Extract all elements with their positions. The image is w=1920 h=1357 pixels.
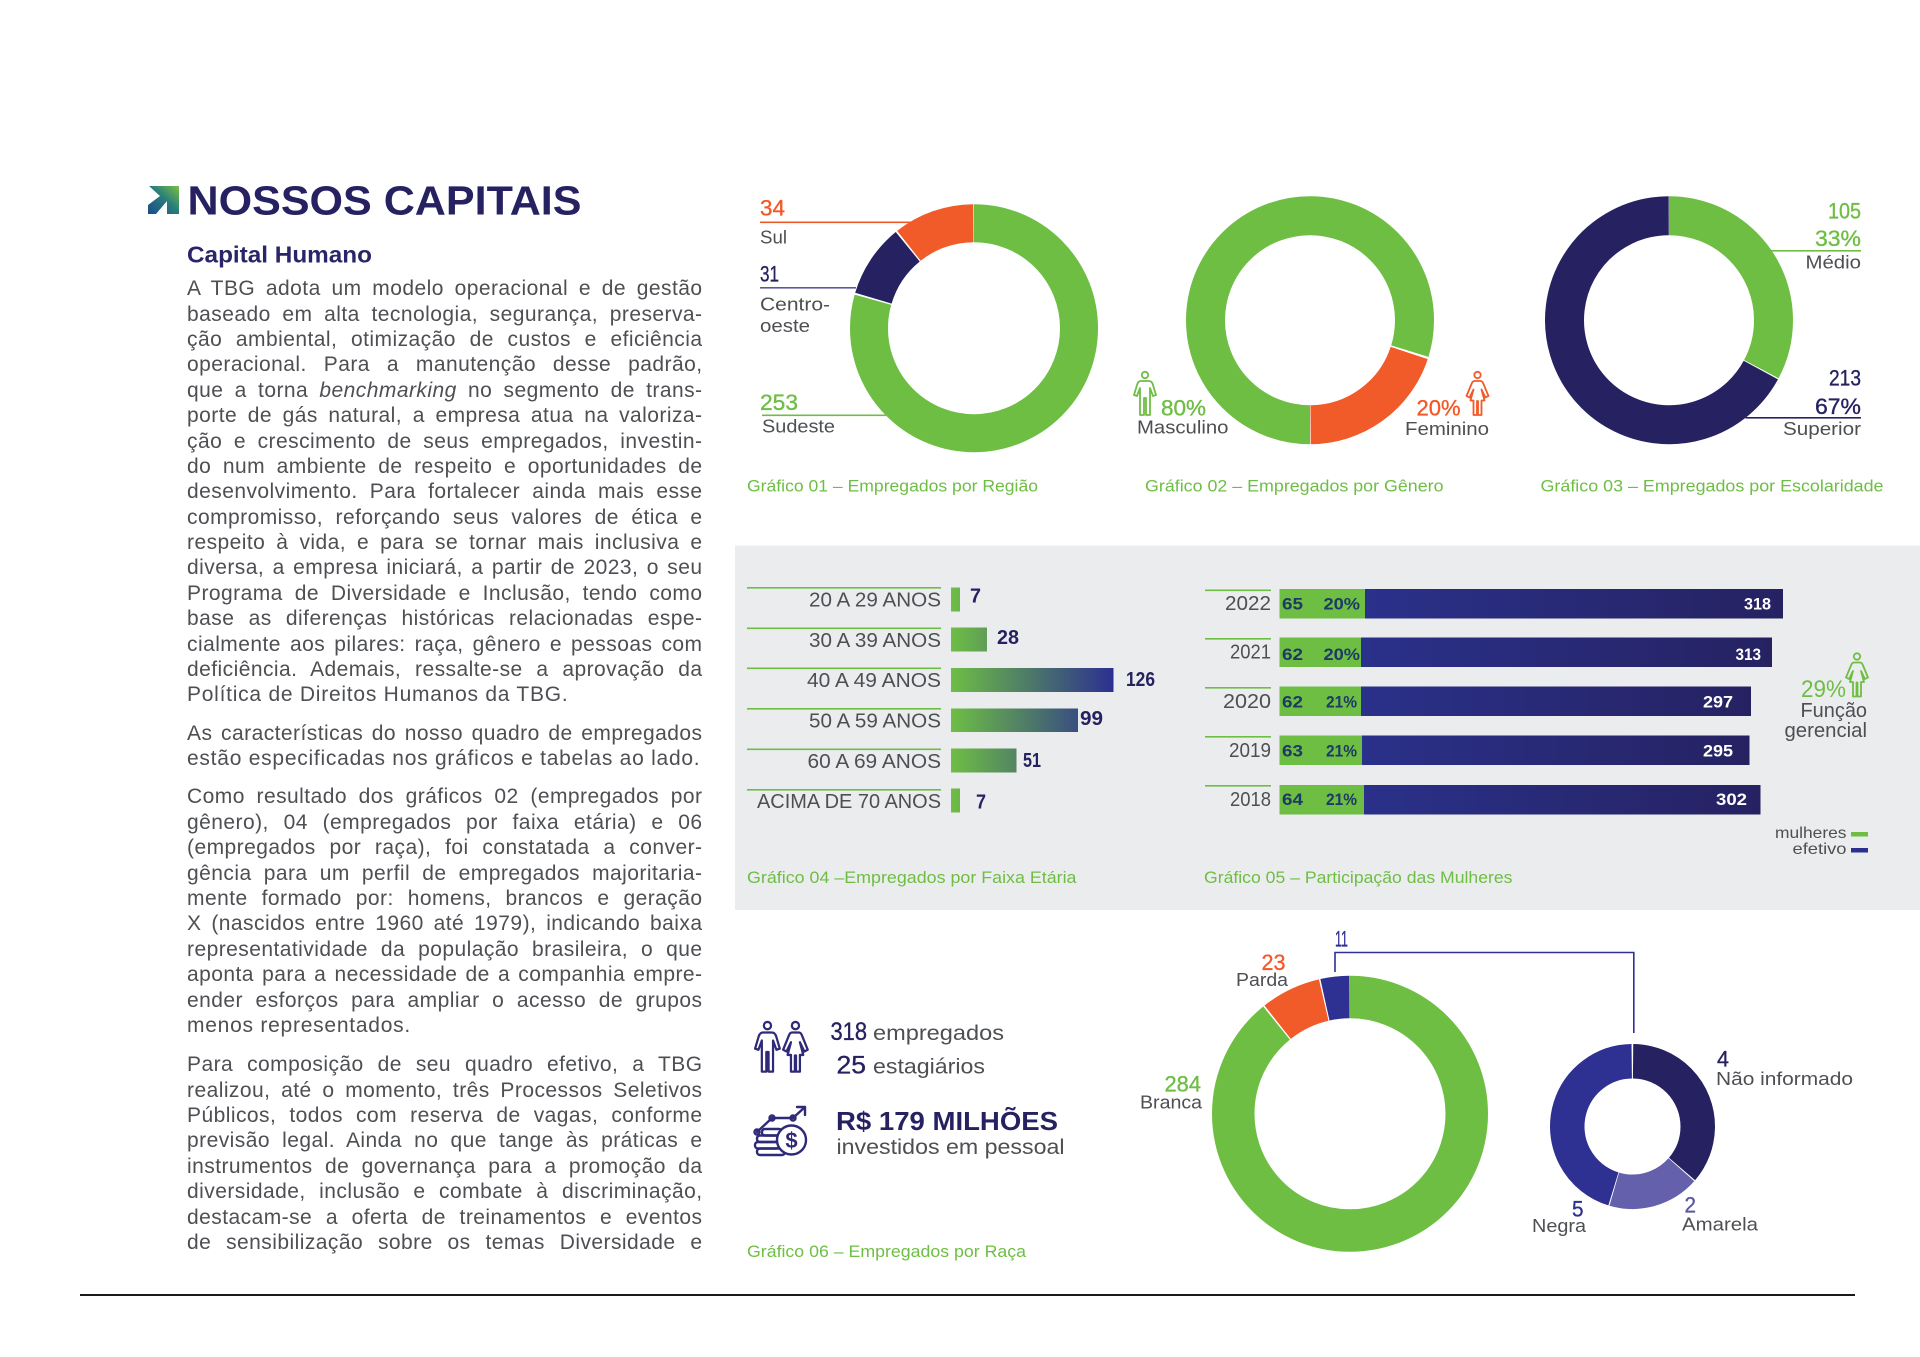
- paragraph 3: gênero), 04 (empregados por faixa etária) e 06: [187, 811, 702, 834]
- label: 11: 11: [1335, 926, 1348, 952]
- row: 2022: 20%: [1324, 596, 1360, 614]
- row: 2020: [1205, 686, 1751, 716]
- chart 04: employees by age: [747, 586, 1155, 887]
- paragraph 4: realizou, até o momento, três Processos Seletivos: [187, 1079, 702, 1102]
- legend: [1775, 825, 1868, 858]
- text: 25 estagiários: estagiários: [873, 1056, 985, 1078]
- paragraph 4: Para composição de seu quadro efetivo, a TBG: [187, 1053, 702, 1076]
- paragraph 3: (empregados por raça), foi constatada a conver-: [187, 836, 702, 859]
- paragraph 3: X (nascidos entre 1960 até 1979), indicando baixa: [187, 912, 702, 935]
- paragraph 1: baseado em alta tecnologia, segurança, preserva-: [187, 303, 702, 326]
- paragraph 1: Política de Direitos Humanos da TBG.: [187, 683, 568, 706]
- label: Feminino: Feminino: [1405, 418, 1489, 439]
- paragraph 1: porte de gás natural, a empresa atua na valoriza-: [187, 404, 702, 427]
- label: Parda: 23: [1262, 950, 1286, 975]
- donut: education: [1527, 179, 1811, 462]
- row: 40 a 49 anos: 40 A 49 ANOS: [807, 670, 941, 692]
- label: Centro-oeste: oeste: [760, 315, 810, 336]
- label: Médio: [1771, 198, 1861, 273]
- label: Não informado: 4: [1717, 1046, 1729, 1072]
- label: Médio: Médio: [1806, 252, 1861, 273]
- row: 30 a 39 anos: [747, 627, 1019, 652]
- caption: chart 02: Gráfico 02 – Empregados por Gênero: [1145, 476, 1444, 495]
- paragraph 4: destacam-se a oferta de treinamentos e eventos: [187, 1206, 702, 1229]
- row: 40 a 49 anos: 126: [1126, 669, 1155, 691]
- row: 40 a 49 anos: [747, 668, 1155, 692]
- label: Branca: Branca: [1140, 1092, 1203, 1112]
- label: Médio: 105: [1828, 198, 1861, 224]
- label: Centro-oeste: 31: [760, 262, 779, 286]
- label: Branca: 284: [1164, 1072, 1201, 1096]
- row: 2019: [1205, 736, 1750, 765]
- paragraph 3: menos representados.: [187, 1014, 411, 1037]
- row: 20 a 29 anos: 20 A 29 ANOS: [809, 590, 941, 612]
- row: 2019: 2019: [1229, 740, 1271, 762]
- row: 20 a 29 anos: [747, 586, 981, 612]
- donut: race: [1186, 950, 1514, 1278]
- label: Feminino: [1405, 396, 1489, 439]
- row: 2018: 302: [1716, 791, 1747, 809]
- chart 02: employees by gender: [1134, 188, 1489, 495]
- row: 30 a 39 anos: 30 A 39 ANOS: [809, 630, 941, 652]
- paragraph 3: ender esforços para ampliar o acesso de grupos: [187, 989, 702, 1012]
- row: 2019: 21%: [1326, 742, 1357, 760]
- icon: coins with rising arrow: [754, 1107, 806, 1155]
- label: Centro-oeste: Centro-: [760, 294, 830, 314]
- label: Feminino: 20%: [1416, 396, 1460, 420]
- icon: coins with rising arrow: $: [785, 1128, 798, 1153]
- paragraph 1: deficiência. Ademais, ressalte-se a aprovação da: [187, 658, 702, 681]
- row: 20 a 29 anos: 7: [970, 586, 981, 608]
- icon: male figure: [1134, 372, 1156, 415]
- paragraph 1: A TBG adota um modelo operacional e de gestão: [187, 277, 702, 300]
- paragraph 4: instrumentos de governança para a promoção da: [187, 1155, 702, 1178]
- stats: employees and interns: [755, 1018, 1004, 1080]
- legend: efetivo: [1792, 841, 1847, 858]
- paragraph 3: Como resultado dos gráficos 02 (empregados por: [187, 785, 702, 808]
- row: 2019: 295: [1703, 742, 1733, 760]
- label: Amarela: [1682, 1192, 1759, 1234]
- row: 2022: 2022: [1225, 593, 1271, 615]
- paragraph 2: [187, 722, 702, 770]
- donut: region: [827, 181, 1121, 476]
- row: 2022: 65: [1282, 596, 1303, 614]
- callout: women in management: gerencial: [1784, 720, 1867, 742]
- donut: breakdown of 11: [1540, 1034, 1725, 1219]
- paragraph 3: [187, 785, 702, 1037]
- icon: two people: [755, 1022, 808, 1072]
- title: NOSSOS CAPITAIS: [188, 178, 582, 224]
- paragraph 4: previsão legal. Ainda no que tange às práticas e: [187, 1129, 702, 1152]
- label: Superior: [1746, 366, 1861, 439]
- label: Sul: 34: [760, 196, 785, 220]
- text: 25 estagiários: [836, 1052, 985, 1080]
- row: 2020: 62: [1282, 694, 1303, 712]
- row: 2021: 2021: [1230, 642, 1271, 664]
- row: 2018: [1205, 785, 1760, 814]
- label: Masculino: Masculino: [1137, 416, 1228, 438]
- row: 2018: 2018: [1230, 789, 1271, 811]
- label: Superior: Superior: [1783, 418, 1861, 439]
- row: 2018: 64: [1282, 791, 1304, 809]
- row: acima de 70 anos: [747, 788, 986, 814]
- row: 2021: 313: [1736, 646, 1761, 664]
- label: Branca: [1140, 1072, 1203, 1112]
- chart 06: employees by race: [1140, 926, 1853, 1278]
- paragraph 1: que a torna benchmarking no segmento de trans-: [187, 379, 702, 402]
- panel: grey band with bar charts: [735, 546, 1920, 910]
- legend: mulheres: [1775, 825, 1846, 842]
- row: 2020: 297: [1703, 694, 1733, 712]
- paragraph 1: diversa, a empresa iniciará, a partir de 2023, o seu: [187, 556, 702, 579]
- label: Não informado: Não informado: [1716, 1068, 1853, 1089]
- text: 318 empregados: empregados: [873, 1022, 1004, 1045]
- row: 2021: [1205, 638, 1772, 667]
- row: 2021: 62: [1282, 646, 1303, 664]
- row: 60 a 69 anos: [747, 748, 1041, 773]
- label: Sul: [760, 196, 912, 248]
- caption: chart 04: Gráfico 04 –Empregados por Faixa Etária: [747, 868, 1077, 887]
- row: 50 a 59 anos: 50 A 59 ANOS: [809, 710, 941, 732]
- paragraph 1: Programa de Diversidade e Inclusão, tendo como: [187, 582, 702, 605]
- paragraph 4: diversidade, inclusão e combate à discriminação,: [187, 1180, 702, 1203]
- donut: gender: [1178, 188, 1442, 452]
- paragraph 3: representatividade da população brasileira, o que: [187, 938, 702, 961]
- icon: female figure: [1466, 372, 1488, 415]
- label: Médio: 33%: [1815, 226, 1861, 251]
- text: 318 empregados: 318: [830, 1018, 867, 1046]
- paragraph 3: gência para um perfil de empregados majoritaria-: [187, 862, 702, 885]
- chart 01: employees by region: [747, 181, 1121, 495]
- paragraph 1: compromisso, reforçando seus valores de ética e: [187, 506, 702, 529]
- row: 2022: 318: [1744, 596, 1771, 614]
- paragraph 1: [187, 277, 702, 706]
- callout: women in management: Função: [1800, 700, 1867, 722]
- stats: investment in people: [754, 1106, 1064, 1159]
- label: Sudeste: Sudeste: [762, 416, 835, 436]
- paragraph 1: desenvolvimento. Para fortalecer ainda mais esse: [187, 480, 702, 503]
- label: Sudeste: [760, 390, 886, 436]
- label: Superior: 213: [1829, 366, 1861, 390]
- label: Centro-oeste: [760, 262, 856, 336]
- label: Amarela: Amarela: [1682, 1214, 1759, 1234]
- text: 25 estagiários: 25: [836, 1052, 866, 1080]
- paragraph 1: operacional. Para a manutenção desse padrão,: [187, 353, 702, 376]
- paragraph 4: Públicos, todos com reserva de vagas, conforme: [187, 1104, 702, 1127]
- label: Masculino: 80%: [1161, 396, 1206, 420]
- paragraph 3: aponta para a necessidade de a companhia empre-: [187, 963, 702, 986]
- icon: title arrow: [148, 186, 179, 214]
- text: R$ 179 milhões: R$ 179 MILHÕES: [836, 1106, 1058, 1136]
- label: Masculino: [1137, 396, 1228, 438]
- callout: women in management: [1784, 653, 1868, 742]
- paragraph 1: ção ambiental, otimização de custos e eficiência: [187, 328, 702, 351]
- label: Superior: 67%: [1815, 394, 1861, 419]
- callout: women in management: 29%: [1801, 676, 1846, 703]
- row: 2020: 21%: [1326, 694, 1357, 712]
- row: 60 a 69 anos: 60 A 69 ANOS: [808, 751, 941, 773]
- caption: chart 03: Gráfico 03 – Empregados por Escolaridade: [1540, 476, 1884, 495]
- label: Negra: Negra: [1532, 1215, 1587, 1236]
- label: Negra: [1532, 1196, 1587, 1236]
- caption: chart 01: Gráfico 01 – Empregados por Região: [747, 476, 1038, 495]
- chart 05: participation of women: [1204, 589, 1868, 887]
- paragraph 2: estão especificadas nos gráficos e tabelas ao lado.: [187, 747, 700, 770]
- label: Parda: Parda: [1236, 969, 1289, 990]
- label: Sul: Sul: [760, 227, 787, 248]
- paragraph 3: mente formado por: homens, brancos e geração: [187, 887, 702, 910]
- caption: chart 06: Gráfico 06 – Empregados por Raça: [747, 1242, 1027, 1261]
- row: 2022: [1205, 589, 1783, 618]
- row: 2020: 2020: [1223, 691, 1271, 713]
- row: 2019: 63: [1282, 742, 1303, 760]
- paragraph 1: cialmente aos pilares: raça, gênero e pessoas com: [187, 633, 702, 656]
- text: investidos em pessoal: investidos em pessoal: [836, 1136, 1064, 1159]
- paragraph 1: respeito à vida, e para se tornar mais inclusiva e: [187, 531, 702, 554]
- paragraph 4: de sensibilização sobre os temas Diversidade e: [187, 1231, 702, 1254]
- subheading: Capital Humano: Capital Humano: [187, 242, 372, 268]
- row: 2018: 21%: [1326, 791, 1357, 809]
- row: 50 a 59 anos: 99: [1080, 708, 1103, 730]
- label: Sudeste: 253: [760, 390, 798, 415]
- paragraph 2: As características do nosso quadro de empregados: [187, 722, 702, 745]
- text: 318 empregados: [830, 1018, 1004, 1046]
- row: 2021: 20%: [1324, 646, 1360, 664]
- label: Não informado: [1716, 1046, 1853, 1089]
- row: acima de 70 anos: 7: [976, 792, 986, 814]
- paragraph 1: do num ambiente de respeito e oportunidades de: [187, 455, 702, 478]
- row: 30 a 39 anos: 28: [997, 627, 1019, 649]
- caption: chart 05: Gráfico 05 – Participação das Mulheres: [1204, 868, 1512, 887]
- connector line: [1335, 952, 1634, 1033]
- paragraph 1: ção e crescimento de seus empregados, investin-: [187, 430, 702, 453]
- row: acima de 70 anos: ACIMA DE 70 ANOS: [757, 791, 941, 813]
- footer rule: [80, 1294, 1855, 1296]
- row: 60 a 69 anos: 51: [1023, 750, 1041, 772]
- paragraph 1: base as diferenças históricas relacionadas espe-: [187, 607, 702, 630]
- row: 50 a 59 anos: [747, 708, 1103, 732]
- label: Parda: [1236, 950, 1289, 990]
- label: Amarela: 2: [1684, 1192, 1696, 1218]
- chart 03: employees by education: [1527, 179, 1884, 495]
- paragraph 4: [187, 1053, 702, 1254]
- label: Negra: 5: [1572, 1196, 1584, 1222]
